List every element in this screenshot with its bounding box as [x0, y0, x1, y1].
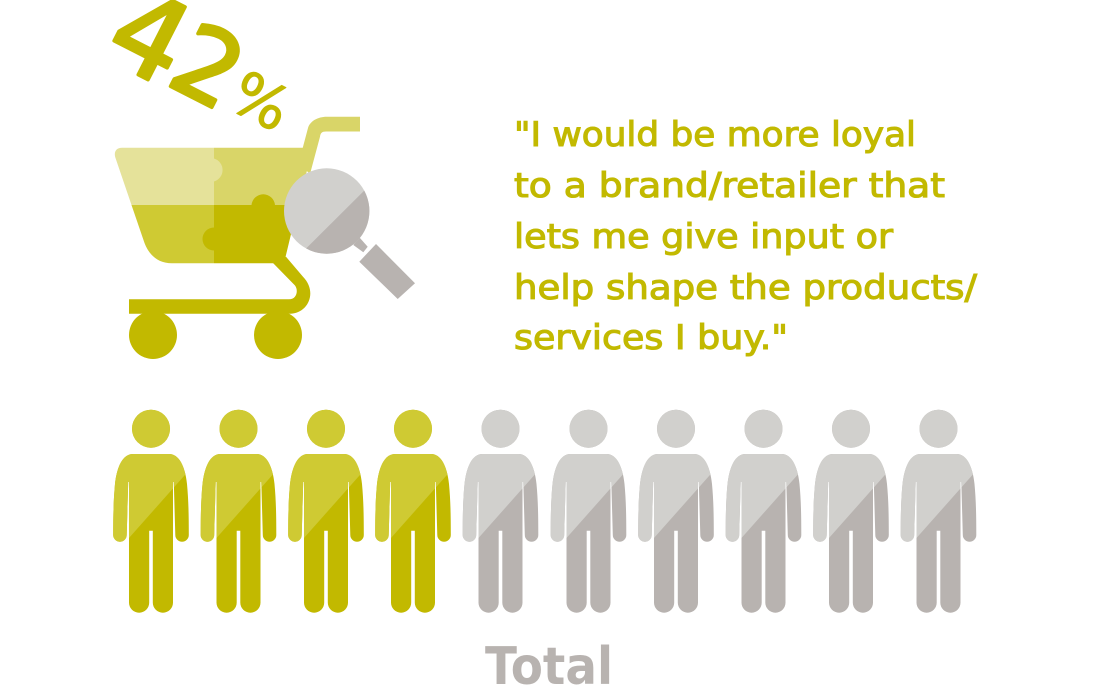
basket top-right puzzle piece — [214, 148, 313, 205]
icon: magnifying glass — [284, 168, 415, 299]
magnifier handle — [359, 244, 415, 299]
cart handle — [295, 117, 360, 174]
quote text: "I would be more loyal — [514, 115, 916, 155]
magnifier lens — [284, 168, 369, 254]
infographic — [112, 0, 978, 684]
magnifier lens shade — [306, 190, 370, 254]
person 3 highlighted — [288, 410, 364, 613]
quote text: help shape the products/ — [514, 268, 978, 308]
basket bottom-left puzzle piece — [132, 205, 214, 263]
person 10 grey — [901, 410, 976, 613]
person 6 grey — [551, 410, 626, 613]
big number: 42% — [88, 0, 302, 146]
left wheel — [129, 311, 177, 359]
cart frame — [129, 257, 310, 314]
person 7 grey — [638, 410, 714, 613]
basket bottom-right puzzle piece — [202, 194, 298, 263]
right wheel — [254, 311, 302, 359]
person 2 highlighted — [201, 410, 276, 613]
icon: shopping cart — [115, 117, 360, 359]
quote text — [514, 115, 978, 358]
quote text: lets me give input or — [514, 217, 893, 257]
person 5 grey — [463, 410, 538, 613]
person 9 grey — [813, 410, 889, 613]
quote text: services I buy." — [514, 318, 788, 358]
basket top-left puzzle piece — [115, 148, 223, 205]
magnifier neck — [353, 237, 368, 252]
person 1 highlighted — [113, 410, 189, 613]
quote text: to a brand/retailer that — [514, 166, 945, 206]
person 8 grey — [726, 410, 801, 613]
big number: 42%: % — [219, 58, 302, 146]
person 4 highlighted — [375, 410, 451, 613]
big number: 42%: 2 — [153, 0, 263, 133]
pictogram row: 10 people, 4 highlighted — [113, 410, 976, 613]
